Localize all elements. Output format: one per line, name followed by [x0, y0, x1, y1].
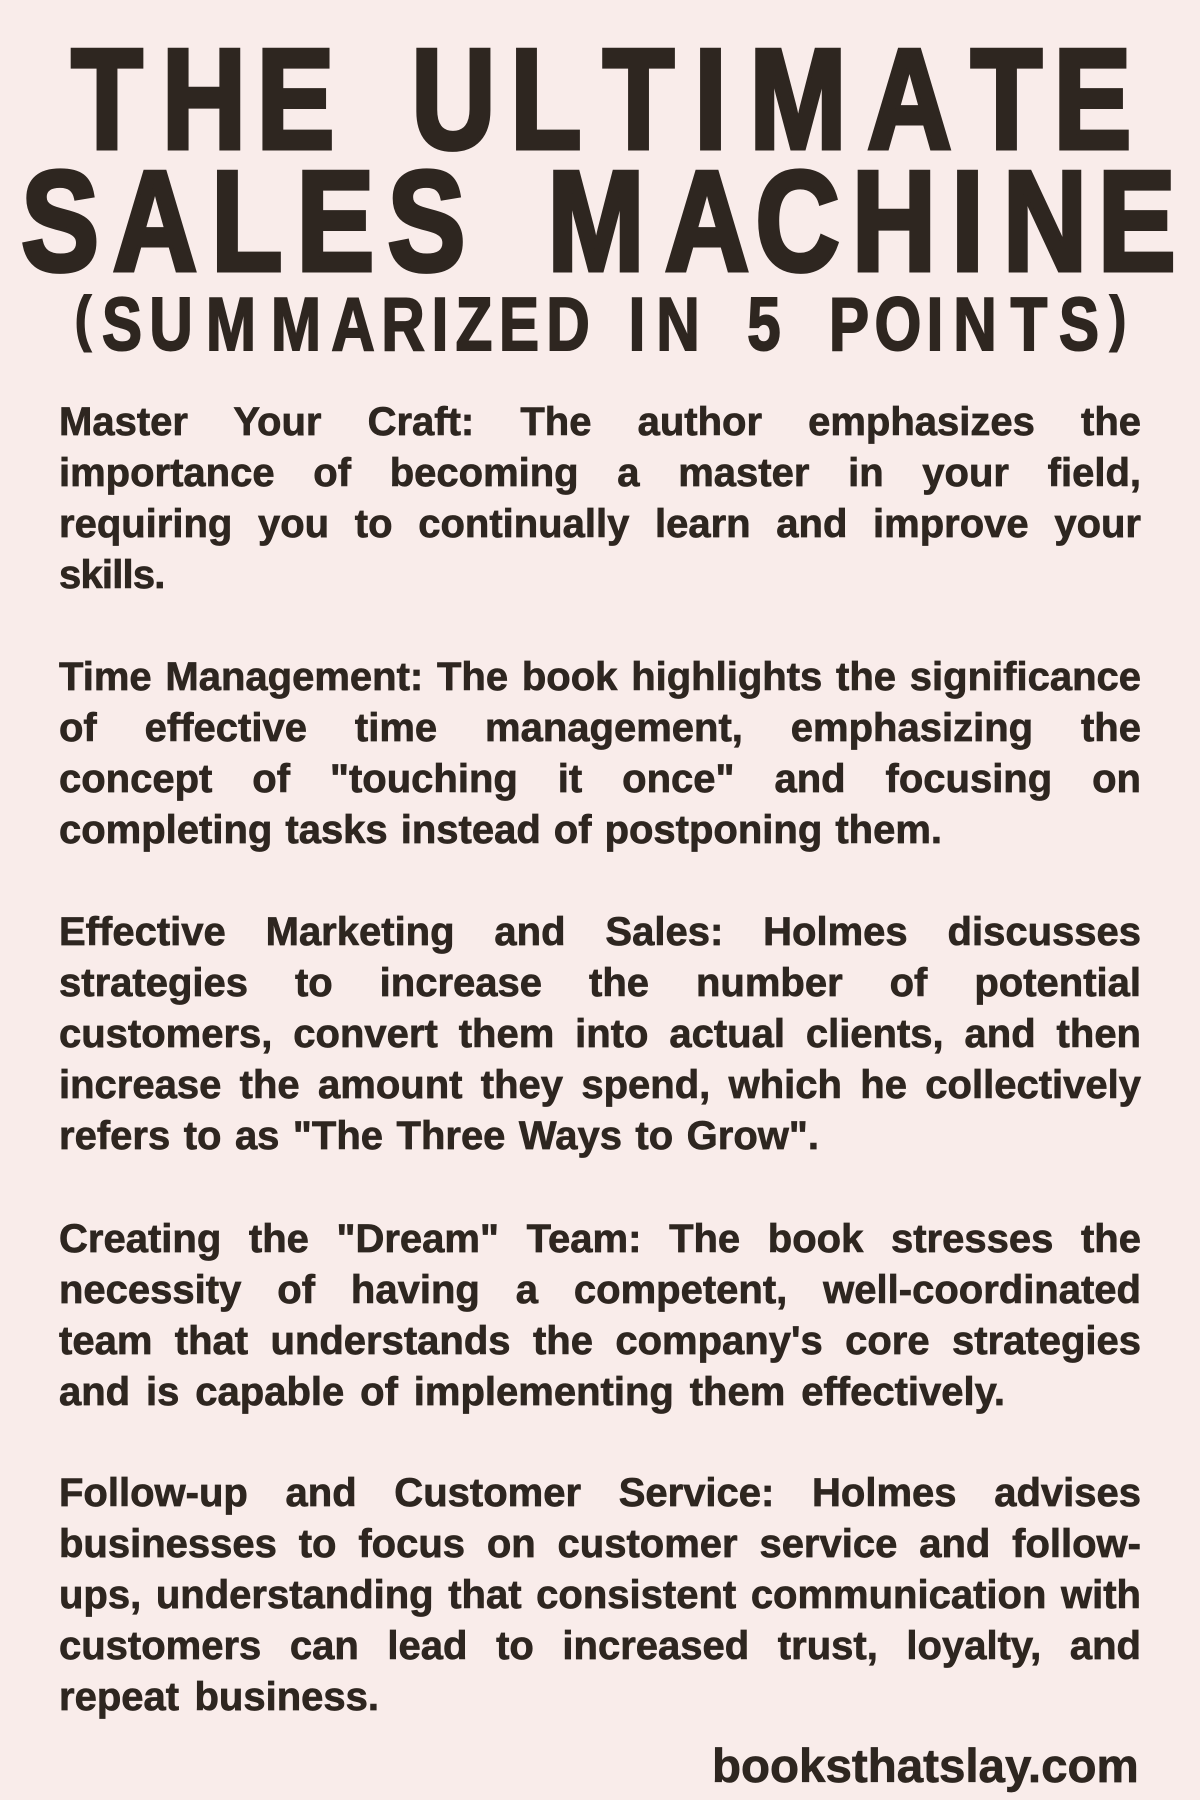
point 5: follow-up and customer service: customers can lead to increased trust, loyalty, and: [59, 1624, 1141, 1668]
point 1: master your craft: skills.: [59, 553, 165, 597]
title block: [21, 19, 1176, 367]
point 1: master your craft: importance of becoming a master in your field,: [59, 451, 1141, 495]
point 5: follow-up and customer service: businesses to focus on customer service and follow-: [59, 1522, 1141, 1566]
point 3: effective marketing and sales: Effective Marketing and Sales: Holmes discusses: [59, 910, 1141, 954]
point 2: time management: concept of "touching it once" and focusing on: [59, 757, 1141, 801]
point 1: master your craft: Master Your Craft: The author emphasizes the: [59, 400, 1141, 444]
point 5: follow-up and customer service: repeat business.: [59, 1675, 379, 1719]
point 3: effective marketing and sales: strategies to increase the number of potential: [59, 961, 1141, 1005]
point 4: creating the dream team: team that understands the company's core strategies: [59, 1319, 1141, 1363]
point 3: effective marketing and sales: refers to as "The Three Ways to Grow".: [59, 1114, 819, 1158]
point 3: effective marketing and sales: [59, 910, 1142, 1158]
subtitle: SUMMARIZED IN 5 POINTS: [102, 284, 1099, 367]
point 4: creating the dream team: Creating the "Dream" Team: The book stresses the: [59, 1217, 1141, 1261]
point 2: time management: of effective time management, emphasizing the: [59, 706, 1141, 750]
point 2: time management: completing tasks instead of postponing them.: [59, 808, 942, 852]
point 4: creating the dream team: necessity of having a competent, well-coordinated: [59, 1268, 1141, 1312]
point 5: follow-up and customer service: [59, 1471, 1141, 1719]
website credit: booksthatslay.com: [712, 1740, 1139, 1793]
point 4: creating the dream team: [59, 1217, 1141, 1414]
title line 1: THE ULTIMATE: [71, 19, 1131, 179]
point 3: effective marketing and sales: customers, convert them into actual clients, and then: [59, 1012, 1141, 1056]
point 1: master your craft: requiring you to continually learn and improve your: [59, 502, 1141, 546]
subtitle: ): [1110, 285, 1126, 352]
point 4: creating the dream team: and is capable of implementing them effectively.: [59, 1370, 1005, 1414]
point 1: master your craft: [59, 400, 1141, 597]
point 5: follow-up and customer service: ups, understanding that consistent communication with: [59, 1573, 1141, 1617]
point 5: follow-up and customer service: Follow-up and Customer Service: Holmes advises: [59, 1471, 1141, 1515]
title line 2: SALES MACHINE: [21, 141, 1176, 301]
point 2: time management: Time Management: The book highlights the significance: [59, 655, 1141, 699]
point 2: time management: [59, 655, 1141, 852]
subtitle: (: [75, 285, 92, 352]
point 3: effective marketing and sales: increase the amount they spend, which he collectively: [59, 1063, 1141, 1107]
